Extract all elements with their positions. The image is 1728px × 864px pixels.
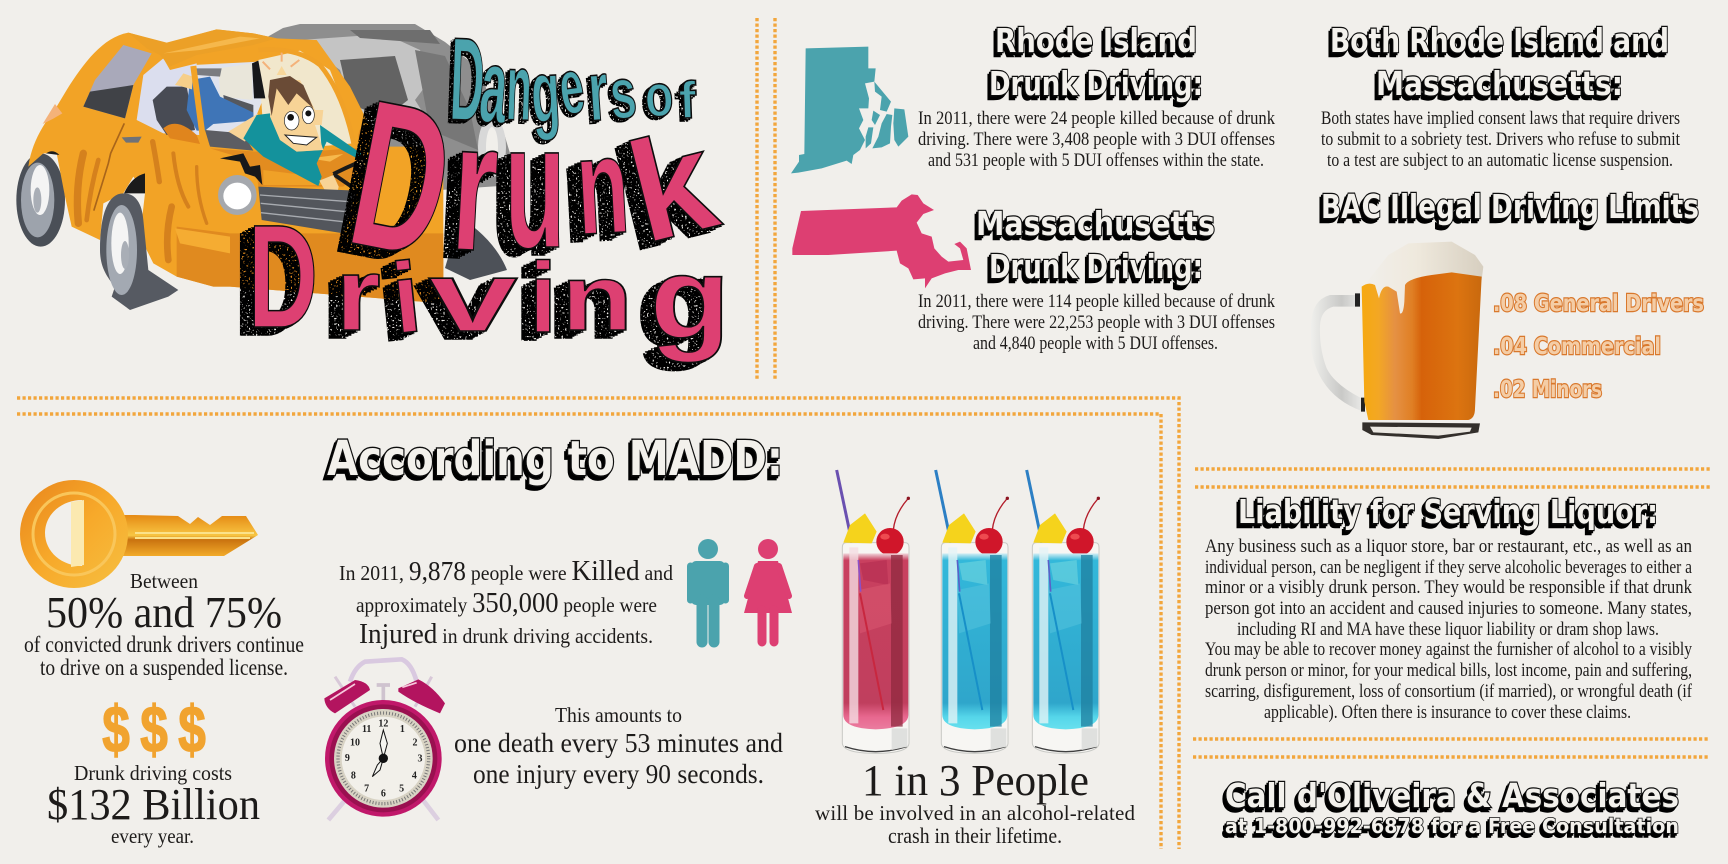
title: Drunk Driving: r bbox=[448, 82, 503, 291]
front wheel bbox=[100, 193, 178, 310]
clock numerals: 1 bbox=[400, 724, 405, 735]
door window bbox=[137, 58, 199, 135]
arch shadows bbox=[124, 173, 145, 193]
heading: Rhode Island Drunk Driving: Drunk Driving: bbox=[989, 64, 1203, 103]
text: cost statistic: Drunk driving costs bbox=[74, 761, 232, 785]
heading: Both Rhode Island and Massachusetts: Massachusetts: bbox=[1376, 64, 1623, 103]
icon: Rhode Island map bbox=[791, 47, 908, 173]
body shading bbox=[77, 124, 207, 260]
driver hair bbox=[268, 76, 313, 116]
drink 2 blue bbox=[936, 470, 1009, 753]
tail light bbox=[43, 104, 62, 124]
clock bells bbox=[324, 680, 370, 713]
driver eyes bbox=[284, 111, 299, 130]
title: Drunk Driving: k bbox=[613, 98, 731, 274]
grille bbox=[258, 187, 357, 233]
rear wheel bbox=[16, 153, 65, 247]
legend: BAC limits bbox=[1493, 291, 1704, 403]
heading: Massachusetts Drunk Driving: Drunk Driving: bbox=[989, 247, 1203, 286]
title: Dangers of bbox=[448, 14, 698, 147]
title: Dangers of: f bbox=[678, 72, 698, 130]
text: suspended license statistic bbox=[24, 569, 304, 680]
text: killed and injured statistic bbox=[339, 555, 673, 650]
seat and dash bbox=[223, 95, 253, 117]
title: Drunk Driving: v bbox=[429, 241, 517, 353]
text: 1 in 3 people statistic: will be involved in an alcohol-related bbox=[815, 801, 1136, 825]
roof crumple bbox=[128, 29, 277, 67]
clock numerals: 11 bbox=[362, 724, 371, 735]
windshield frame bbox=[258, 49, 354, 145]
chart: three drinks pictogram bbox=[837, 470, 1100, 753]
title: Drunk Driving: D bbox=[248, 195, 318, 359]
title: Dangers of: a bbox=[476, 27, 513, 146]
clock numerals: 6 bbox=[381, 789, 386, 800]
passenger bbox=[175, 68, 253, 131]
title: Drunk Driving: u bbox=[505, 85, 565, 285]
heading: Massachusetts Drunk Driving bbox=[976, 204, 1215, 286]
text: 1 in 3 people statistic: 1 in 3 People bbox=[862, 756, 1089, 805]
text: 1 in 3 people statistic: crash in their lifetime. bbox=[888, 823, 1062, 848]
clock legs bbox=[335, 677, 432, 707]
rear side window bbox=[83, 45, 152, 118]
text: liability explanation: applicable). Often there is insurance to cover these claims. bbox=[1264, 702, 1631, 723]
text: death and injury frequency: This amounts to bbox=[555, 703, 682, 727]
title: Drunk Driving: g bbox=[650, 234, 730, 363]
heading: According to MADD: According to MADD: bbox=[327, 431, 783, 487]
call to action: Call d'Oliveira & Associates bbox=[1225, 776, 1679, 815]
icon: dollar signs: $ bbox=[102, 693, 130, 767]
title: Dangers of: g bbox=[528, 42, 562, 141]
call to action bbox=[1225, 776, 1679, 838]
clock stem bbox=[377, 685, 390, 703]
title: Drunk Driving: i bbox=[387, 241, 426, 355]
text: cost statistic: $132 Billion bbox=[47, 780, 260, 829]
car body bbox=[28, 29, 443, 303]
mug base bbox=[1362, 422, 1480, 439]
title: Dangers of: r bbox=[585, 43, 611, 139]
drink 3 blue bbox=[1027, 470, 1100, 753]
text: Massachusetts statistics: and 4,840 people with 5 DUI offenses. bbox=[973, 333, 1218, 354]
title: Drunk Driving: n bbox=[572, 108, 633, 264]
headlight bbox=[218, 175, 257, 215]
heading: Massachusetts Drunk Driving: Massachusetts bbox=[976, 204, 1215, 243]
door pillar bbox=[193, 66, 204, 147]
clock numerals: 5 bbox=[399, 784, 404, 795]
text: death and injury frequency: one injury every 90 seconds. bbox=[473, 759, 764, 789]
icon: beer mug bbox=[1311, 242, 1483, 439]
text: death and injury frequency: one death every 53 minutes and bbox=[454, 728, 783, 758]
driver shoulder bbox=[228, 113, 258, 142]
text: Rhode Island statistics: driving. There were 3,408 people with 3 DUI offenses bbox=[918, 129, 1275, 150]
heading: Rhode Island Drunk Driving: Rhode Island bbox=[995, 21, 1197, 60]
text: killed and injured statistic: In 2011, 9,878 people were Killed and bbox=[339, 555, 673, 587]
crack in hood bbox=[220, 153, 262, 185]
icon: woman bbox=[744, 539, 792, 642]
title: Dangers of: o bbox=[643, 62, 675, 130]
title: Drunk Driving: r bbox=[335, 237, 381, 353]
icon: alarm clock bbox=[324, 659, 445, 820]
foam bbox=[1362, 242, 1483, 313]
driver torso and arms bbox=[243, 113, 363, 186]
heading: Both Rhode Island and Massachusetts bbox=[1330, 21, 1669, 103]
text: Massachusetts statistics: In 2011, there were 114 people killed because of drunk bbox=[918, 291, 1275, 312]
driver mouth bbox=[285, 135, 317, 145]
bumper bbox=[177, 227, 443, 303]
illustration: crashed orange car with drunk driver bbox=[16, 24, 512, 310]
legend: BAC limits: .02 Minors bbox=[1493, 377, 1602, 403]
text: death and injury frequency bbox=[454, 703, 783, 789]
clock numerals: 7 bbox=[364, 784, 369, 795]
clock numerals: 9 bbox=[345, 753, 350, 764]
hood bbox=[210, 147, 363, 187]
text: cost statistic bbox=[47, 761, 260, 848]
door handle bbox=[122, 137, 142, 143]
text: suspended license statistic: Between bbox=[130, 569, 198, 593]
title: Drunk Driving: D bbox=[335, 54, 469, 303]
text: cost statistic: every year. bbox=[111, 824, 194, 848]
grey car behind bbox=[262, 24, 512, 190]
text: liability explanation bbox=[1205, 536, 1693, 723]
clock numerals: 3 bbox=[417, 754, 422, 765]
heading: Rhode Island Drunk Driving bbox=[989, 21, 1203, 103]
text: 1 in 3 people statistic bbox=[815, 756, 1136, 848]
text: killed and injured statistic: approximately 350,000 people were bbox=[356, 587, 657, 619]
drink 1 pink bbox=[837, 470, 910, 753]
clock hands bbox=[380, 730, 387, 758]
clock numerals: 2 bbox=[412, 738, 417, 749]
icon: orange key bbox=[20, 480, 258, 588]
title: Dangers of: D bbox=[448, 14, 487, 147]
text: killed and injured statistic: Injured in drunk driving accidents. bbox=[359, 618, 653, 650]
title: Dangers of: s bbox=[606, 52, 640, 134]
driver bbox=[228, 76, 364, 197]
clock numerals: 4 bbox=[412, 771, 417, 782]
legend: BAC limits: .04 Commercial bbox=[1493, 334, 1661, 360]
beer bbox=[1362, 272, 1482, 420]
mug handle bbox=[1311, 295, 1362, 411]
cabin, driver and hood: drawn in zoomed coordinates bbox=[175, 49, 372, 233]
title: Drunk Driving: n bbox=[561, 245, 633, 350]
clock numerals: 12 bbox=[378, 719, 388, 730]
clock numerals: 10 bbox=[350, 737, 360, 748]
car side and rear: drawn in zoomed coordinates bbox=[16, 29, 443, 303]
right side mirror bbox=[358, 126, 372, 147]
icon: Massachusetts map bbox=[792, 194, 971, 288]
text: Rhode Island statistics bbox=[918, 108, 1275, 171]
crushed right wheel bbox=[445, 217, 507, 280]
icon: dollar signs: $ bbox=[140, 693, 168, 767]
call to action: at 1-800-992-6878 for a Free Consultation bbox=[1225, 814, 1679, 838]
text: suspended license statistic: of convicted drunk drivers continue bbox=[24, 632, 304, 657]
text: Rhode Island statistics: and 531 people with 5 DUI offenses within the state. bbox=[928, 150, 1264, 171]
driver head bbox=[270, 80, 323, 152]
text: Massachusetts statistics bbox=[918, 291, 1275, 354]
title: Drunk Driving bbox=[248, 54, 731, 363]
steering hands bbox=[319, 175, 339, 197]
text: implied consent laws bbox=[1321, 108, 1681, 171]
text: suspended license statistic: to drive on a suspended license. bbox=[40, 655, 288, 680]
icon: dollar signs bbox=[102, 693, 206, 767]
title: Dangers of: e bbox=[553, 43, 589, 132]
clock handle bbox=[350, 659, 417, 682]
text: Rhode Island statistics: In 2011, there were 24 people killed because of drunk bbox=[918, 108, 1275, 129]
icon: man bbox=[690, 539, 726, 642]
clock body bbox=[325, 700, 442, 817]
windshield interior bbox=[193, 62, 263, 147]
icon: dollar signs: $ bbox=[178, 693, 206, 767]
text: Massachusetts statistics: driving. There were 22,253 people with 3 DUI offenses bbox=[918, 312, 1275, 333]
title: Dangers of: n bbox=[505, 34, 534, 141]
clock numerals bbox=[345, 719, 422, 800]
title: Drunk Driving: i bbox=[529, 242, 557, 354]
clock numerals: 8 bbox=[351, 771, 356, 782]
steering wheel bbox=[333, 162, 360, 187]
text: suspended license statistic: 50% and 75% bbox=[46, 588, 282, 637]
